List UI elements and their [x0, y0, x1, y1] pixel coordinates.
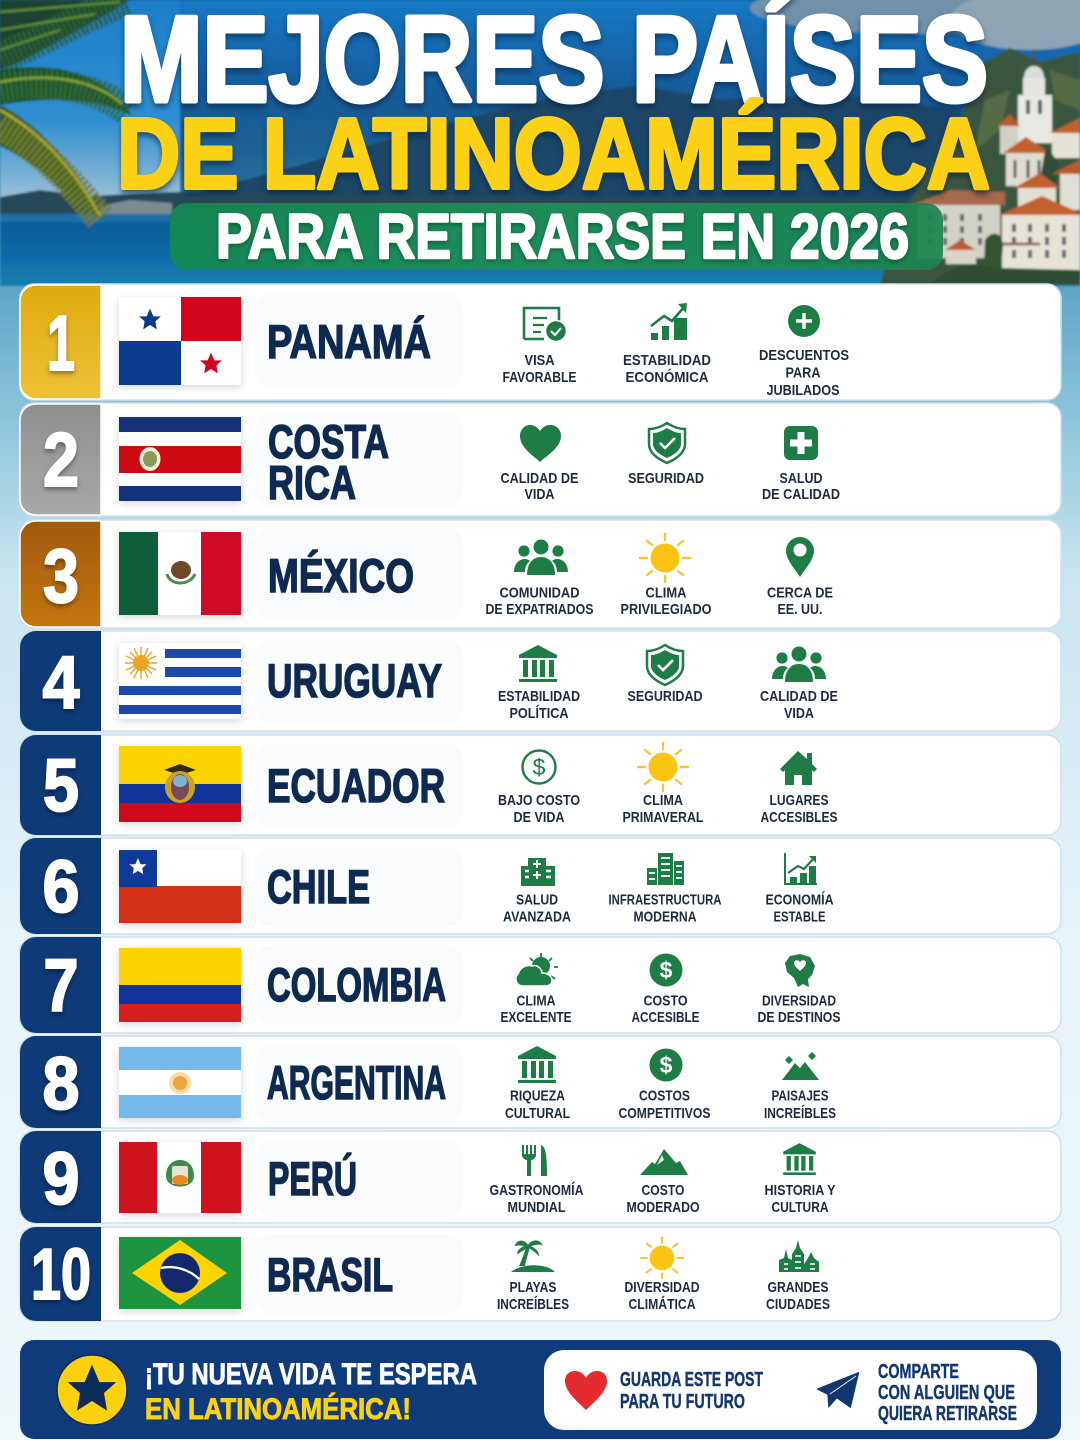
feature: salud avanzada: AVANZADA	[503, 908, 571, 926]
feature: diversidad climática: DIVERSIDAD	[624, 1279, 700, 1296]
feature: cerca de EE. UU.: CERCA DE	[767, 584, 833, 602]
feature: riqueza cultural	[505, 1046, 570, 1122]
feature: costos competitivos: COMPETITIVOS	[618, 1105, 710, 1122]
feature: diversidad de destinos: DIVERSIDAD	[762, 992, 836, 1010]
feature: historia y cultura	[764, 1143, 836, 1216]
feature: historia y cultura: CULTURA	[772, 1199, 829, 1216]
feature: calidad de vida: CALIDAD DE	[760, 688, 838, 705]
feature: grandes ciudades: CIUDADES	[766, 1296, 830, 1313]
feature: historia y cultura: HISTORIA Y	[764, 1182, 836, 1199]
footer headline	[145, 1358, 477, 1426]
country name	[255, 293, 463, 388]
flag México	[119, 532, 241, 615]
row 7: Colombia	[20, 937, 1061, 1033]
feature: estabilidad política: ESTABILIDAD	[498, 688, 580, 705]
country name: COLOMBIA	[267, 958, 446, 1011]
feature: grandes ciudades: GRANDES	[768, 1279, 828, 1296]
country name	[255, 640, 463, 724]
save text: GUARDA ESTE POST	[620, 1369, 763, 1391]
country name: ARGENTINA	[267, 1056, 446, 1109]
feature: visa favorable: VISA	[524, 352, 555, 369]
feature: costo moderado	[626, 1149, 700, 1216]
feature: calidad de vida: VIDA	[784, 705, 814, 722]
feature: comunidad de expatriados: DE EXPATRIADOS	[486, 601, 594, 618]
feature: cerca de EE. UU.: EE. UU.	[778, 601, 822, 618]
feature: salud de calidad: SALUD	[780, 470, 823, 487]
share text: COMPARTE	[878, 1361, 959, 1383]
feature: bajo costo de vida: BAJO COSTO	[498, 792, 580, 809]
feature: descuentos para jubilados: DESCUENTOS	[759, 347, 849, 364]
call-to-action panel	[544, 1350, 1037, 1430]
feature: salud de calidad: DE CALIDAD	[762, 486, 840, 503]
feature: salud avanzada	[503, 858, 571, 926]
feature: paisajes increíbles	[764, 1052, 836, 1122]
flag Costa Rica	[119, 417, 241, 501]
feature: playas increíbles	[497, 1241, 569, 1313]
footer headline: EN LATINOAMÉRICA!	[145, 1392, 411, 1426]
feature: economía estable: ESTABLE	[774, 908, 826, 926]
rank badge 7	[20, 937, 101, 1033]
rank badge 3: 3	[43, 534, 79, 619]
country name: CHILE	[267, 860, 370, 913]
row 6: Chile	[20, 838, 1061, 934]
country name: COSTA	[268, 415, 389, 468]
feature: clima primaveral: PRIMAVERAL	[622, 809, 704, 826]
feature: bajo costo de vida: DE VIDA	[514, 809, 565, 826]
feature: salud avanzada: SALUD	[516, 892, 558, 908]
feature: economía estable: ECONOMÍA	[766, 892, 834, 908]
country name	[255, 945, 463, 1025]
feature: descuentos para jubilados: PARA	[786, 364, 821, 382]
flag Panamá	[119, 297, 241, 385]
flag Ecuador	[119, 746, 241, 822]
feature: estabilidad económica: ECONÓMICA	[626, 368, 709, 386]
row 2: Costa Rica	[20, 403, 1061, 516]
feature: calidad de vida	[760, 646, 838, 722]
icon: star badge	[57, 1355, 127, 1425]
feature: visa favorable	[502, 308, 576, 386]
feature: estabilidad política	[498, 645, 580, 722]
feature: paisajes increíbles: INCREÍBLES	[764, 1105, 836, 1122]
feature: costo accesible: COSTO	[644, 992, 688, 1010]
feature: calidad de vida: CALIDAD DE	[500, 470, 578, 487]
feature: bajo costo de vida	[498, 750, 580, 826]
share text: CON ALGUIEN QUE	[878, 1382, 1015, 1404]
feature: playas increíbles: INCREÍBLES	[497, 1296, 569, 1313]
subtitle green pill: PARA RETIRARSE EN 2026	[216, 202, 909, 272]
feature: gastronomía mundial: MUNDIAL	[508, 1199, 566, 1216]
flag Colombia	[119, 948, 241, 1022]
feature: clima excelente	[500, 953, 572, 1026]
share text	[878, 1361, 1017, 1425]
feature: costos competitivos: COSTOS	[639, 1088, 690, 1104]
row 9: Perú	[20, 1131, 1061, 1223]
rank badge 3	[20, 521, 101, 627]
feature: seguridad: SEGURIDAD	[628, 470, 704, 487]
feature: costo accesible	[632, 954, 700, 1026]
country name	[255, 412, 463, 509]
rank badge 4	[20, 631, 101, 731]
feature: descuentos para jubilados	[759, 305, 849, 399]
save text	[620, 1369, 763, 1413]
feature: costo accesible: ACCESIBLE	[632, 1009, 700, 1026]
feature: riqueza cultural: RIQUEZA	[510, 1088, 565, 1104]
country name	[255, 1234, 463, 1314]
country name: URUGUAY	[267, 654, 442, 707]
footer headline: ¡TU NUEVA VIDA TE ESPERA	[145, 1358, 477, 1391]
feature: clima excelente: EXCELENTE	[500, 1009, 572, 1026]
rank badge 4: 4	[42, 641, 80, 724]
feature: estabilidad económica	[623, 303, 711, 386]
rank badge 5: 5	[43, 744, 79, 827]
church tower	[1018, 95, 1052, 143]
save text: PARA TU FUTURO	[620, 1391, 745, 1413]
country name: MÉXICO	[268, 549, 414, 602]
rank badge 9: 9	[42, 1137, 80, 1220]
row 3: México	[20, 520, 1061, 628]
rank badge 1: 1	[47, 299, 75, 387]
feature: seguridad	[628, 645, 703, 705]
share text: QUIERA RETIRARSE	[878, 1403, 1017, 1425]
country name: PANAMÁ	[267, 315, 431, 368]
feature: economía estable	[766, 853, 834, 926]
rank badge 6: 6	[42, 845, 80, 928]
flag Brasil	[119, 1237, 241, 1309]
country name: PERÚ	[268, 1152, 357, 1205]
country name	[255, 1139, 463, 1217]
icon: red heart	[565, 1371, 607, 1410]
footer banner	[20, 1340, 1061, 1439]
feature: bajo costo de vida: $	[533, 754, 546, 780]
country name	[255, 847, 463, 927]
row 1: Panamá	[20, 284, 1061, 400]
row 4: Uruguay	[20, 631, 1061, 731]
row 5: Ecuador	[20, 735, 1061, 835]
rank badge 10: 10	[31, 1235, 91, 1315]
illustration: tropical coast scene	[0, 0, 1080, 286]
rank badge 7: 7	[44, 944, 78, 1027]
flag Perú	[119, 1142, 241, 1213]
feature: seguridad	[628, 423, 704, 487]
rank badge 1	[20, 285, 101, 399]
flag Chile	[119, 850, 241, 923]
feature: costo moderado: COSTO	[642, 1182, 685, 1199]
feature: diversidad climática: CLIMÁTICA	[628, 1296, 696, 1313]
rank badge 8: 8	[42, 1042, 80, 1125]
feature: playas increíbles: PLAYAS	[510, 1279, 556, 1296]
feature: estabilidad política: POLÍTICA	[510, 705, 569, 722]
rank badge 6	[20, 838, 101, 934]
country name	[255, 528, 463, 620]
feature: seguridad: SEGURIDAD	[628, 688, 703, 705]
feature: clima privilegiado	[620, 534, 712, 618]
rank badge 5	[20, 735, 101, 835]
feature: calidad de vida	[500, 425, 578, 503]
feature: gastronomía mundial: GASTRONOMÍA	[490, 1182, 584, 1199]
feature: paisajes increíbles: PAISAJES	[772, 1088, 828, 1104]
rank badge 10	[20, 1227, 101, 1321]
country name	[255, 744, 463, 828]
palm fronds	[0, 0, 130, 70]
country name: RICA	[268, 456, 356, 509]
feature: clima primaveral	[622, 743, 704, 826]
icon: paper plane	[815, 1371, 860, 1409]
feature: infraestructura moderna: MODERNA	[634, 908, 697, 926]
feature: calidad de vida: VIDA	[524, 486, 555, 503]
feature: descuentos para jubilados: JUBILADOS	[766, 382, 840, 399]
country name: BRASIL	[267, 1248, 393, 1301]
feature: lugares accesibles	[760, 751, 838, 826]
feature: gastronomía mundial	[490, 1145, 584, 1216]
feature: diversidad de destinos	[758, 954, 840, 1026]
rank badge 8	[20, 1036, 101, 1128]
feature: clima privilegiado: CLIMA	[646, 584, 687, 602]
feature: clima excelente: CLIMA	[516, 992, 556, 1010]
feature: grandes ciudades	[766, 1240, 830, 1313]
row 8: Argentina	[20, 1036, 1061, 1128]
feature: comunidad de expatriados	[486, 540, 594, 618]
feature: diversidad climática	[624, 1238, 700, 1313]
feature: lugares accesibles: LUGARES	[770, 792, 828, 809]
feature: cerca de EE. UU.	[767, 537, 833, 618]
flag Uruguay	[119, 643, 241, 719]
feature: lugares accesibles: ACCESIBLES	[760, 809, 838, 826]
country name: ECUADOR	[267, 759, 445, 812]
rank badge 2: 2	[43, 418, 79, 503]
row 10: Brasil	[20, 1227, 1061, 1321]
feature: infraestructura moderna	[608, 853, 722, 926]
rank badge 2	[20, 404, 101, 515]
feature: costo moderado: MODERADO	[626, 1199, 700, 1216]
feature: riqueza cultural: CULTURAL	[505, 1105, 570, 1122]
feature: costos competitivos	[618, 1048, 710, 1122]
feature: clima privilegiado: PRIVILEGIADO	[620, 601, 712, 618]
town hill	[880, 48, 1080, 285]
feature: estabilidad económica: ESTABILIDAD	[623, 352, 711, 369]
feature: infraestructura moderna: INFRAESTRUCTURA	[608, 892, 722, 908]
rank badge 9	[20, 1131, 101, 1223]
feature: diversidad de destinos: DE DESTINOS	[758, 1009, 840, 1026]
flag Argentina	[119, 1047, 241, 1118]
feature: visa favorable: FAVORABLE	[502, 369, 576, 386]
feature: comunidad de expatriados: COMUNIDAD	[500, 584, 580, 602]
feature: salud de calidad	[762, 426, 840, 503]
feature: clima primaveral: CLIMA	[643, 792, 683, 809]
country name	[255, 1043, 463, 1123]
